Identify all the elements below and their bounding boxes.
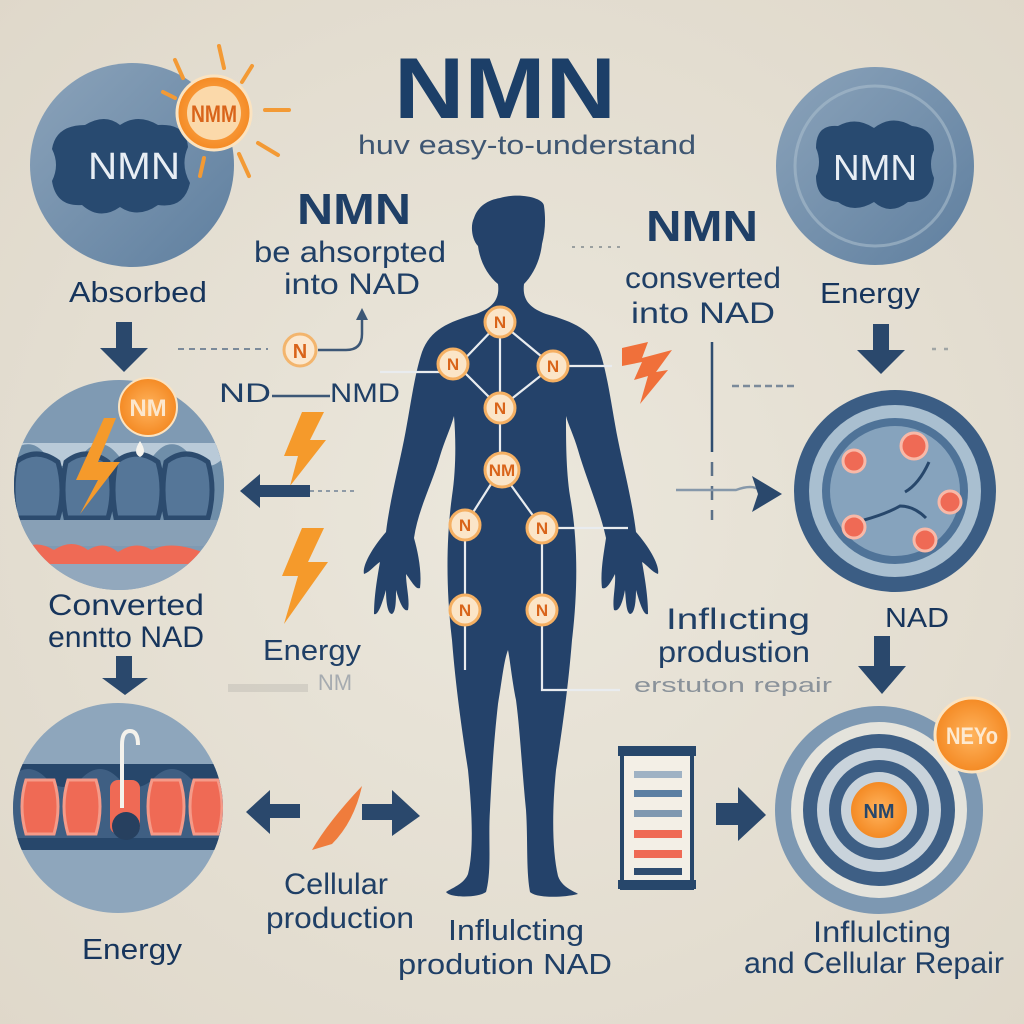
figure: human body: N — [459, 516, 471, 535]
label: Energy bottom: Energy — [82, 934, 183, 966]
panel: absorbed NMN disc — [30, 63, 234, 267]
arrow: to atom disc — [752, 476, 782, 512]
panel: membrane disc: NM — [129, 395, 167, 422]
panel: cell energy disc — [10, 703, 230, 913]
text block: be absorbed: NMN — [297, 185, 411, 234]
figure: human body: N — [547, 357, 559, 376]
panel: target disc: NM — [863, 801, 895, 823]
icon: lightning upper — [284, 412, 326, 486]
panel: membrane disc — [14, 377, 224, 590]
dashes near NMN right — [572, 246, 622, 248]
icon: NMN sun badge: NMM — [191, 101, 237, 128]
icon: lightning on shoulder — [622, 342, 672, 404]
label: ND to NMD — [219, 378, 400, 408]
panel: atom disc — [794, 390, 996, 592]
figure: human body: N — [494, 313, 506, 332]
icon: lightning lower — [282, 528, 328, 624]
label: Influcting production NAD: Influlcting — [448, 915, 584, 947]
label: Influcting production: produstion — [658, 636, 810, 669]
connector: absorbed to body — [178, 308, 368, 366]
arrow: absorbed down — [100, 322, 148, 372]
label: Influcting and Cellular Repair: Influlcting — [813, 916, 951, 949]
label: Cellular production: Cellular — [284, 868, 388, 901]
figure: human body: N — [536, 519, 548, 538]
icon: chart card — [618, 746, 696, 889]
subtitle: huv easy-to-understand — [358, 130, 696, 160]
label: NAD: NAD — [885, 602, 949, 633]
label: Energy left: Energy — [263, 635, 362, 667]
arrow: energy down — [857, 324, 905, 374]
label: Energy right: Energy — [820, 278, 921, 310]
arrow: chart to target — [716, 787, 766, 841]
figure: human body: N — [459, 601, 471, 620]
label: Influcting and Cellular Repair — [744, 916, 1004, 980]
panel: absorbed NMN disc: NMN — [88, 146, 180, 188]
connector: absorbed to body: N — [293, 341, 307, 363]
label: Influcting production: erstuton repair — [634, 675, 833, 697]
text block: be absorbed: be ahsorpted — [254, 236, 446, 269]
panel: energy NMN disc right: NMN — [833, 147, 917, 188]
title: NMN — [394, 41, 616, 137]
figure: human body — [364, 196, 658, 897]
text block: be absorbed: into NAD — [284, 268, 420, 301]
text block: converted into NAD: consverted — [625, 262, 781, 295]
arrow: membrane connector — [240, 474, 356, 508]
label: Absorbed: Absorbed — [69, 277, 207, 309]
panel: target disc — [775, 706, 983, 914]
label: Influcting and Cellular Repair: and Cellular Repair — [744, 947, 1004, 980]
label: Converted into NAD — [48, 589, 204, 654]
arrow: NAD down — [858, 636, 906, 694]
text block: converted into NAD: into NAD — [631, 297, 775, 330]
label: Influcting production NAD: prodution NAD — [398, 949, 612, 981]
label: Converted into NAD: Converted — [48, 589, 204, 622]
icon: NMN sun badge — [163, 46, 289, 176]
icon: NEW badge: NEYo — [946, 723, 998, 750]
label: Influcting production: Inflıcting — [666, 603, 810, 636]
text block: converted into NAD — [625, 202, 781, 330]
connector: vertical right — [676, 342, 956, 520]
label: Converted into NAD: enntto NAD — [48, 621, 204, 654]
icon: NEW badge — [935, 698, 1009, 772]
figure: human body: NM — [489, 461, 515, 480]
label: ND to NMD: ND — [219, 378, 271, 408]
figure: human body: N — [447, 355, 459, 374]
label: Cellular production — [266, 868, 414, 935]
label: Energy left — [228, 635, 362, 695]
label: Cellular production: production — [266, 902, 414, 935]
nodes on body — [438, 307, 568, 625]
network lines on body — [380, 322, 628, 690]
text block: converted into NAD: NMN — [646, 202, 758, 251]
arrow: double cellular — [246, 786, 420, 850]
label: Influcting production — [634, 603, 833, 697]
panel: energy NMN disc right — [776, 67, 974, 265]
text block: be absorbed — [254, 185, 446, 301]
figure: human body: N — [536, 601, 548, 620]
figure: human body: N — [494, 399, 506, 418]
label: Influcting production NAD — [398, 915, 612, 981]
label: ND to NMD: NMD — [330, 378, 400, 408]
label: Energy left: NM — [318, 670, 352, 695]
arrow: converted down — [102, 656, 148, 695]
